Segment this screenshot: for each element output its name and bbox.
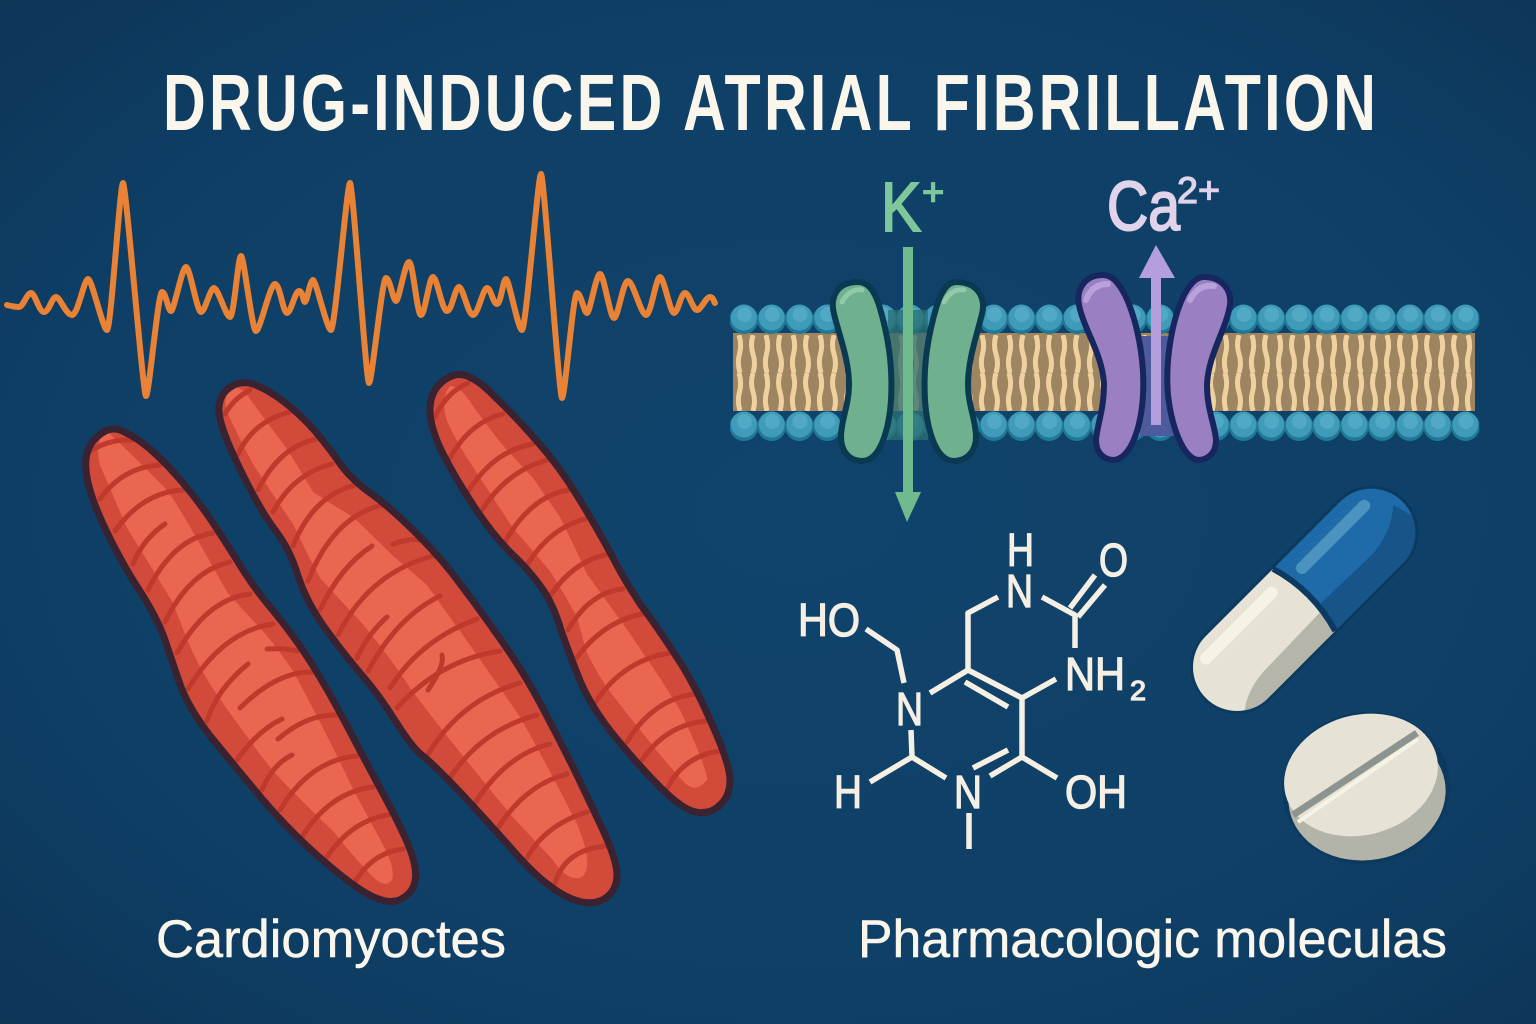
molecule atom labels: NH <box>1065 648 1125 700</box>
molecule atom labels: 2 <box>1130 675 1146 706</box>
molecule atom labels: N <box>896 683 923 735</box>
molecule atom labels: N <box>1006 565 1033 617</box>
label: K+: + <box>922 172 944 214</box>
label: Ca2+: Ca <box>1107 167 1180 245</box>
icon: capsule <box>1190 486 1418 714</box>
molecule atom labels: N <box>954 766 982 818</box>
label: Cardiomyoctes: Cardiomyoctes <box>156 910 506 969</box>
capsule blue half <box>1276 488 1416 628</box>
icon: tablet <box>1270 697 1462 877</box>
molecule atom labels <box>798 524 1146 818</box>
title: DRUG-INDUCED ATRIAL FIBRILLATION <box>163 57 1376 147</box>
molecule bonds <box>866 575 1105 849</box>
arrow: calcium inflow <box>1139 245 1175 425</box>
chart: ECG trace of atrial fibrillation <box>7 174 715 398</box>
molecule: chemical structure <box>798 524 1146 849</box>
molecule atom labels: H <box>1007 524 1034 576</box>
arrow: potassium outflow <box>895 247 921 522</box>
label: K+: K <box>881 168 921 246</box>
diagram: cell membrane with ion channels <box>730 167 1479 522</box>
potassium channel <box>833 282 983 461</box>
capsule white half <box>1193 569 1335 711</box>
molecule atom labels: H <box>834 766 862 818</box>
cell: centre cardiomyocyte <box>219 383 617 903</box>
illustration: cardiomyocyte cells <box>86 374 730 903</box>
lipid bilayer <box>730 301 1479 443</box>
label: Pharmacologic moleculas: Pharmacologic moleculas <box>858 910 1447 969</box>
molecule atom labels: OH <box>1065 766 1127 818</box>
calcium channel <box>1078 275 1230 460</box>
label: Ca2+: 2+ <box>1177 170 1220 211</box>
molecule atom labels: O <box>1099 534 1128 586</box>
molecule atom labels: HO <box>798 594 860 646</box>
cell: right cardiomyocyte <box>430 374 730 813</box>
cell: left cardiomyocyte <box>86 429 416 902</box>
